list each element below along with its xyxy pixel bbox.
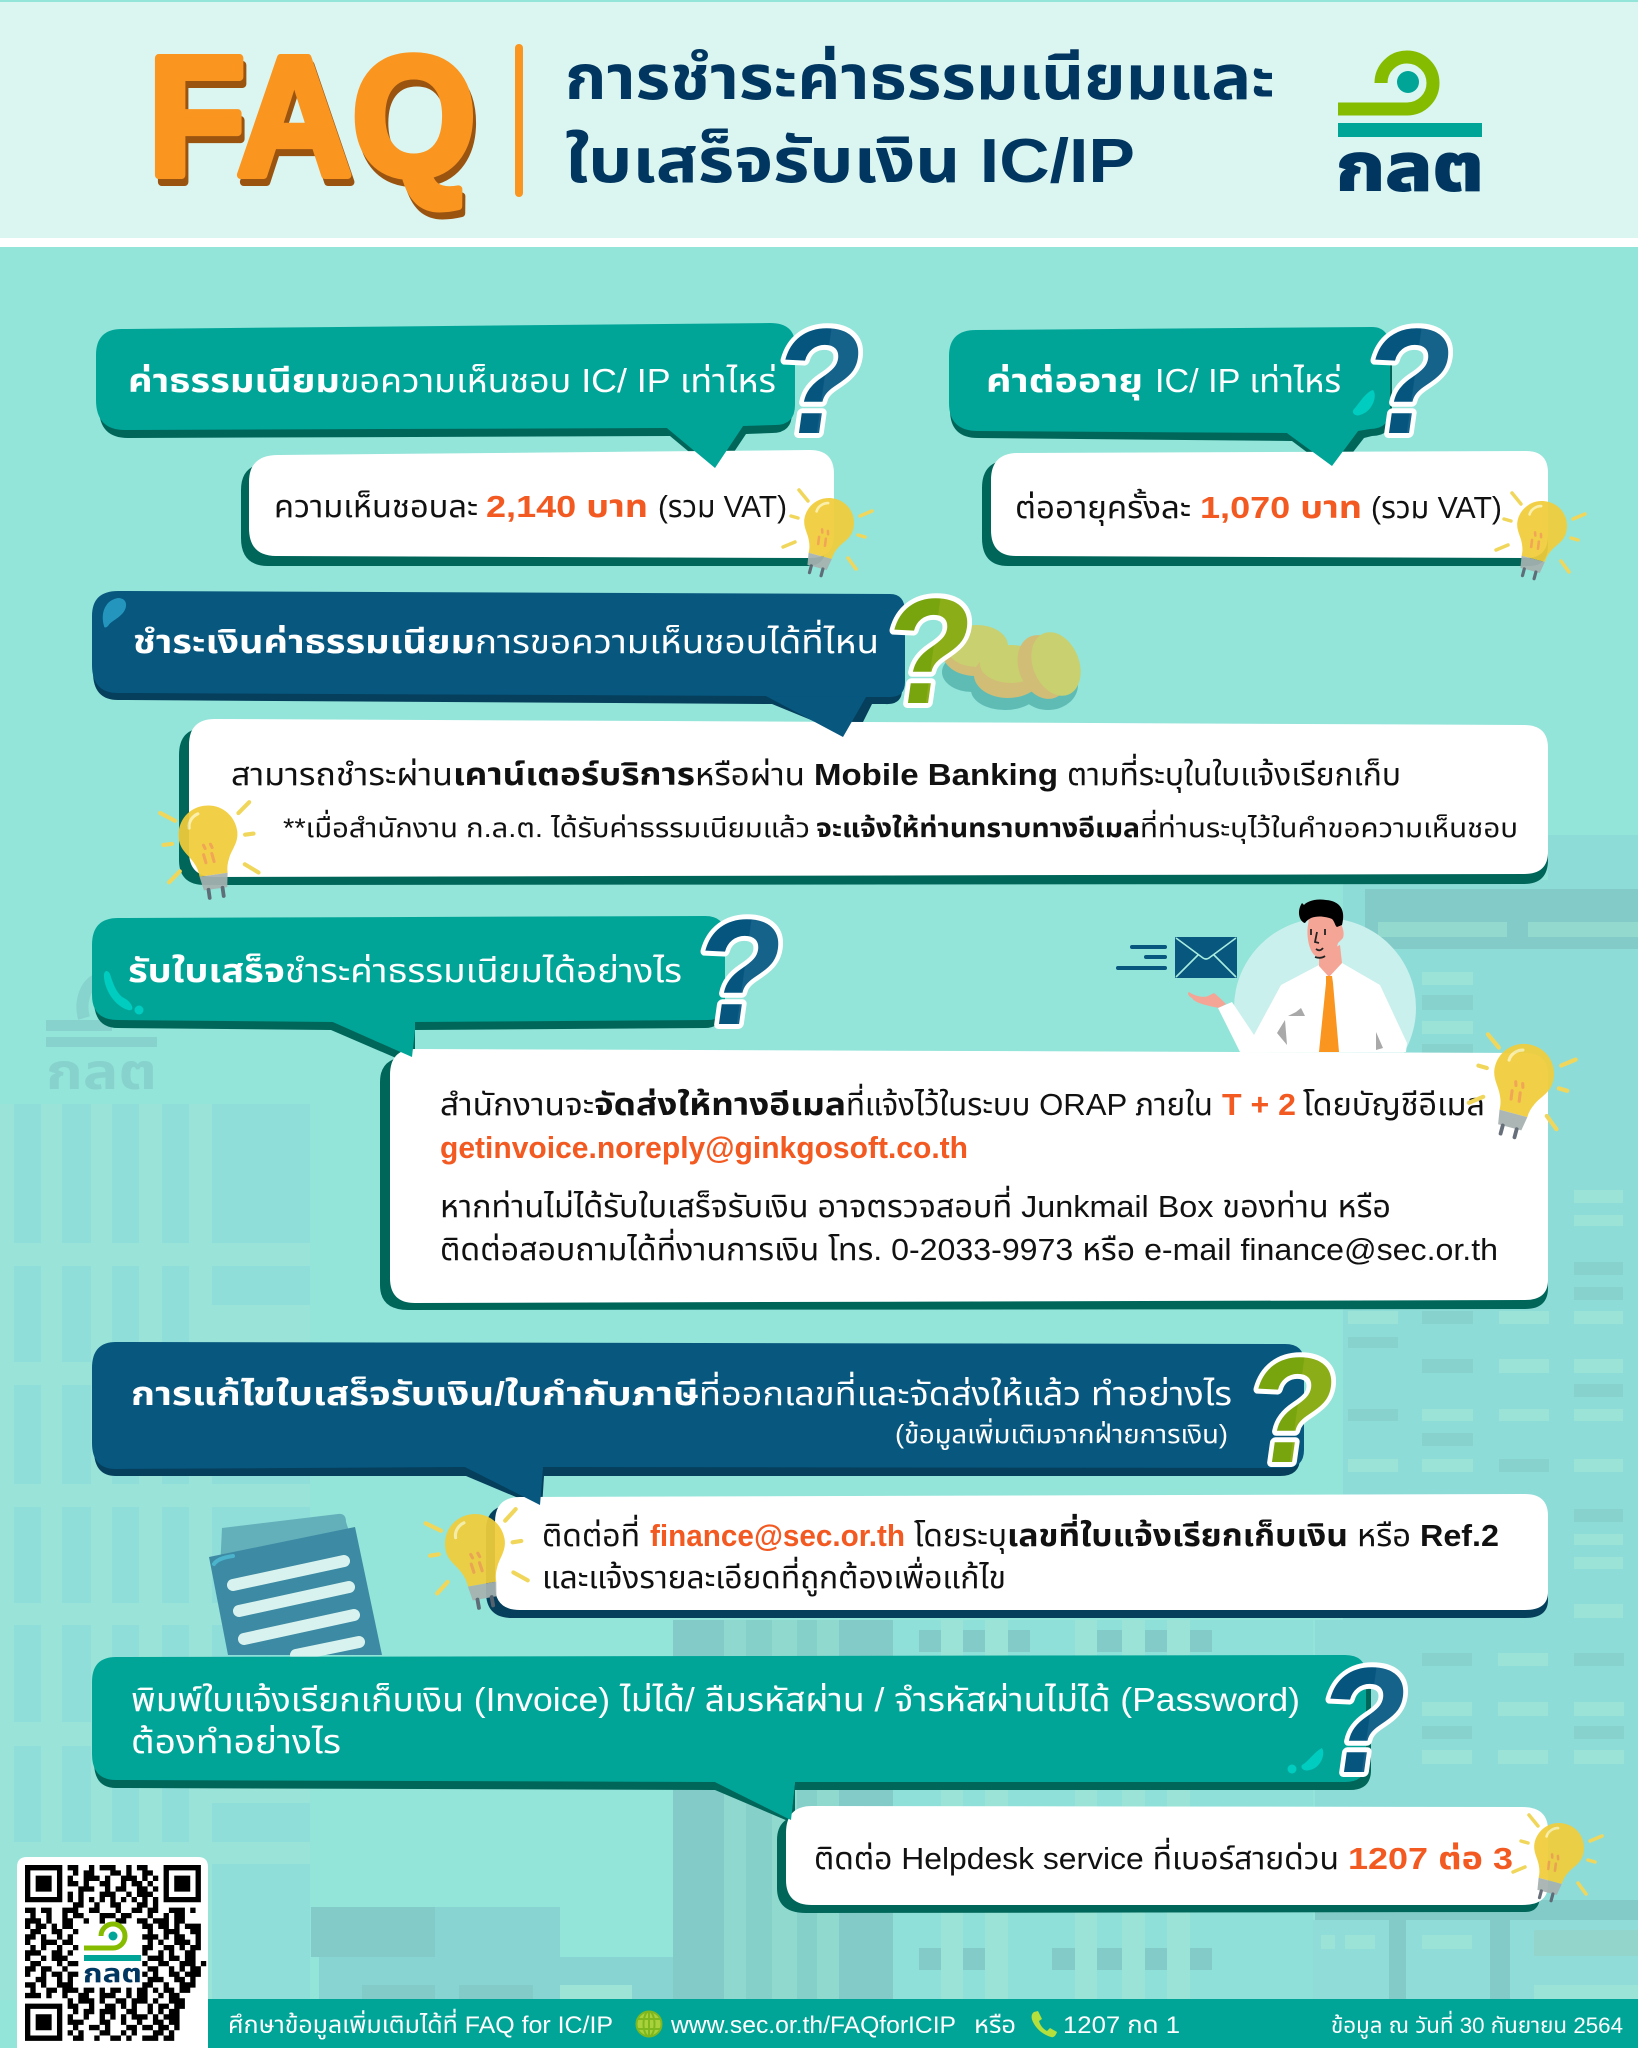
logo: SEC: กลต	[1336, 130, 1484, 204]
panel: correction answer: เลขที่ใบแจ้งเรียกเก็บเงิน	[1007, 1513, 1348, 1553]
footer bar: www.sec.or.th/FAQforICIP	[670, 2012, 956, 2039]
panel: fee question: ขอความเห็นชอบ IC/ IP เท่าไหร่	[340, 362, 776, 399]
icon: question mark green: ?	[873, 568, 983, 736]
icon: phone	[1032, 2011, 1057, 2037]
panel: fee question: ค่าธรรมเนียม	[128, 362, 340, 399]
icon: question mark green: ?	[873, 568, 983, 736]
panel: where to pay question: ชำระเงินค่าธรรมเนียม	[133, 623, 475, 660]
icon: document	[209, 1514, 382, 1655]
panel: renewal answer: ต่ออายุครั้งละ	[1015, 488, 1191, 526]
watermark logo	[46, 978, 157, 1100]
panel: where to pay answer: ตามที่ระบุในใบแจ้งเรียกเก็บ	[1067, 753, 1401, 793]
icon: envelope	[1175, 937, 1237, 978]
panel: fee question	[96, 323, 795, 476]
panel: receipt answer: จัดส่งให้ทางอีเมล	[594, 1087, 846, 1122]
panel: invoice question: พิมพ์ใบแจ้งเรียกเก็บเงิน (Invoice) ไม่ได้/ ลืมรหัสผ่าน / จำรหัสผ่านไม่ได้ (Password)	[131, 1681, 1300, 1718]
panel: renewal answer	[982, 431, 1548, 566]
panel: where to pay answer: ที่ท่านระบุไว้ในคำขอความเห็นชอบ	[1140, 809, 1518, 844]
QR code	[17, 1857, 208, 2048]
panel: where to pay question	[92, 591, 905, 738]
panel: receipt answer: ที่แจ้งไว้ในระบบ ORAP ภายใน	[846, 1083, 1213, 1122]
FAQ wordmark: FAQ	[148, 22, 476, 212]
panel: receipt answer: หากท่านไม่ได้รับใบเสร็จรับเงิน อาจตรวจสอบที่ Junkmail Box ของท่าน หรือ	[440, 1185, 1391, 1224]
icon: light bulb 5	[408, 1486, 551, 1630]
panel: receipt question: ชำระค่าธรรมเนียมได้อย่างไร	[285, 952, 682, 989]
icon: light bulb 6	[1513, 1815, 1602, 1906]
panel: where to pay answer: Mobile Banking	[814, 757, 1058, 792]
panel: where to pay answer: **เมื่อสำนักงาน ก.ล.ต. ได้รับค่าธรรมเนียมแล้ว	[283, 809, 810, 843]
panel: receipt question: รับใบเสร็จ	[128, 952, 285, 989]
panel: renewal question	[949, 327, 1392, 474]
panel: invoice question: ต้องทำอย่างไร	[131, 1723, 341, 1760]
title: ใบเสร็จรับเงิน IC/IP	[565, 127, 1135, 196]
icon: light bulb 2	[1496, 493, 1585, 584]
panel: fee answer: ความเห็นชอบละ	[274, 489, 478, 524]
panel: invoice question	[92, 1655, 1371, 1824]
title	[565, 44, 1275, 196]
icon: question mark blue: ?	[764, 298, 874, 466]
icon: question mark blue 3: ?	[684, 889, 794, 1057]
panel: renewal question: ค่าต่ออายุ	[986, 362, 1143, 401]
watermark logo: กลต	[46, 1044, 157, 1100]
footer bar: ศึกษาข้อมูลเพิ่มเติมได้ที่ FAQ for IC/IP	[228, 2008, 613, 2040]
icon: light bulb 1	[783, 490, 872, 581]
panel: fee answer: 2,140 บาท	[486, 489, 648, 524]
footer bar	[200, 1999, 1638, 2048]
icon: question mark blue 4: ?	[1309, 1637, 1419, 1805]
panel: where to pay answer: หรือผ่าน	[695, 757, 805, 792]
panel: receipt answer: สำนักงานจะ	[440, 1087, 594, 1122]
footer bar: 1207 กด 1	[1063, 2012, 1180, 2039]
icon: globe	[636, 2011, 662, 2037]
icon: coins	[942, 625, 1090, 710]
illustration: man sending email	[1118, 899, 1416, 1098]
title: การชำระค่าธรรมเนียมและ	[565, 44, 1275, 113]
icon: question mark blue: ?	[764, 298, 874, 466]
panel: renewal question: IC/ IP เท่าไหร่	[1155, 362, 1341, 399]
panel: correction question: (ข้อมูลเพิ่มเติมจากฝ่ายการเงิน)	[895, 1418, 1228, 1450]
panel: receipt question	[92, 916, 725, 1064]
panel: renewal answer: (รวม VAT)	[1371, 490, 1502, 525]
speed lines	[1118, 947, 1165, 968]
panel: receipt answer: โดยบัญชีอีเมล	[1303, 1087, 1485, 1122]
panel: fee answer	[241, 426, 834, 566]
panel: where to pay answer	[179, 696, 1548, 885]
panel: renewal answer: 1,070 บาท	[1200, 490, 1362, 525]
panel: correction answer: finance@sec.or.th	[650, 1518, 905, 1553]
icon: light bulb 4	[1469, 1034, 1576, 1143]
icon: question mark green 2: ?	[1237, 1327, 1347, 1495]
logo: SEC	[1336, 57, 1484, 204]
header band	[0, 0, 1638, 247]
panel: receipt answer: getinvoice.noreply@ginkgosoft.co.th	[440, 1130, 968, 1165]
icon: light bulb 3	[143, 779, 281, 919]
icon: question mark green 2: ?	[1237, 1327, 1347, 1495]
header divider	[515, 44, 523, 197]
panel: invoice answer: 1207 ต่อ 3	[1348, 1841, 1513, 1876]
panel: correction answer: โดยระบุ	[914, 1518, 1007, 1554]
footer bar: หรือ	[974, 2012, 1016, 2039]
icon: question mark blue 2: ?	[1354, 298, 1464, 466]
panel: fee answer: (รวม VAT)	[658, 489, 787, 524]
panel: receipt answer: T + 2	[1222, 1087, 1296, 1122]
panel: correction answer: ติดต่อที่	[542, 1514, 640, 1553]
panel: receipt answer: ติดต่อสอบถามได้ที่งานการเงิน โทร. 0-2033-9973 หรือ e-mail finance@sec.or.th	[440, 1228, 1498, 1267]
panel: correction question: ที่ออกเลขที่และจัดส่งให้แล้ว ทำอย่างไร	[699, 1371, 1232, 1412]
icon: question mark blue 4: ?	[1309, 1637, 1419, 1805]
panel: where to pay answer: จะแจ้งให้ท่านทราบทางอีเมล	[816, 813, 1140, 843]
panel: correction answer: และแจ้งรายละเอียดที่ถูกต้องเพื่อแก้ไข	[542, 1556, 1006, 1596]
panel: correction answer: Ref.2	[1420, 1518, 1499, 1553]
icon: question mark blue 3: ?	[684, 889, 794, 1057]
panel: invoice answer: ติดต่อ Helpdesk service ที่เบอร์สายด่วน	[814, 1837, 1339, 1876]
footer bar: ข้อมูล ณ วันที่ 30 กันยายน 2564	[1331, 2010, 1623, 2039]
panel: where to pay answer: สามารถชำระผ่าน	[231, 757, 453, 792]
FAQ wordmark: FAQ	[151, 29, 479, 219]
QR centre logo	[83, 1924, 142, 1988]
panel: where to pay answer: เคาน์เตอร์บริการ	[453, 757, 695, 792]
panel: receipt answer	[333, 1022, 1548, 1310]
panel: where to pay question: การขอความเห็นชอบได้ที่ไหน	[475, 619, 879, 660]
panel: correction question: การแก้ไขใบเสร็จรับเงิน/ใบกำกับภาษี	[131, 1375, 699, 1412]
QR centre logo: กลต	[83, 1958, 142, 1988]
panel: correction answer	[465, 1467, 1548, 1618]
panel: correction answer: หรือ	[1357, 1518, 1411, 1553]
panel: correction question	[92, 1342, 1304, 1508]
icon: question mark blue 2: ?	[1354, 298, 1464, 466]
panel: invoice answer	[715, 1782, 1548, 1913]
